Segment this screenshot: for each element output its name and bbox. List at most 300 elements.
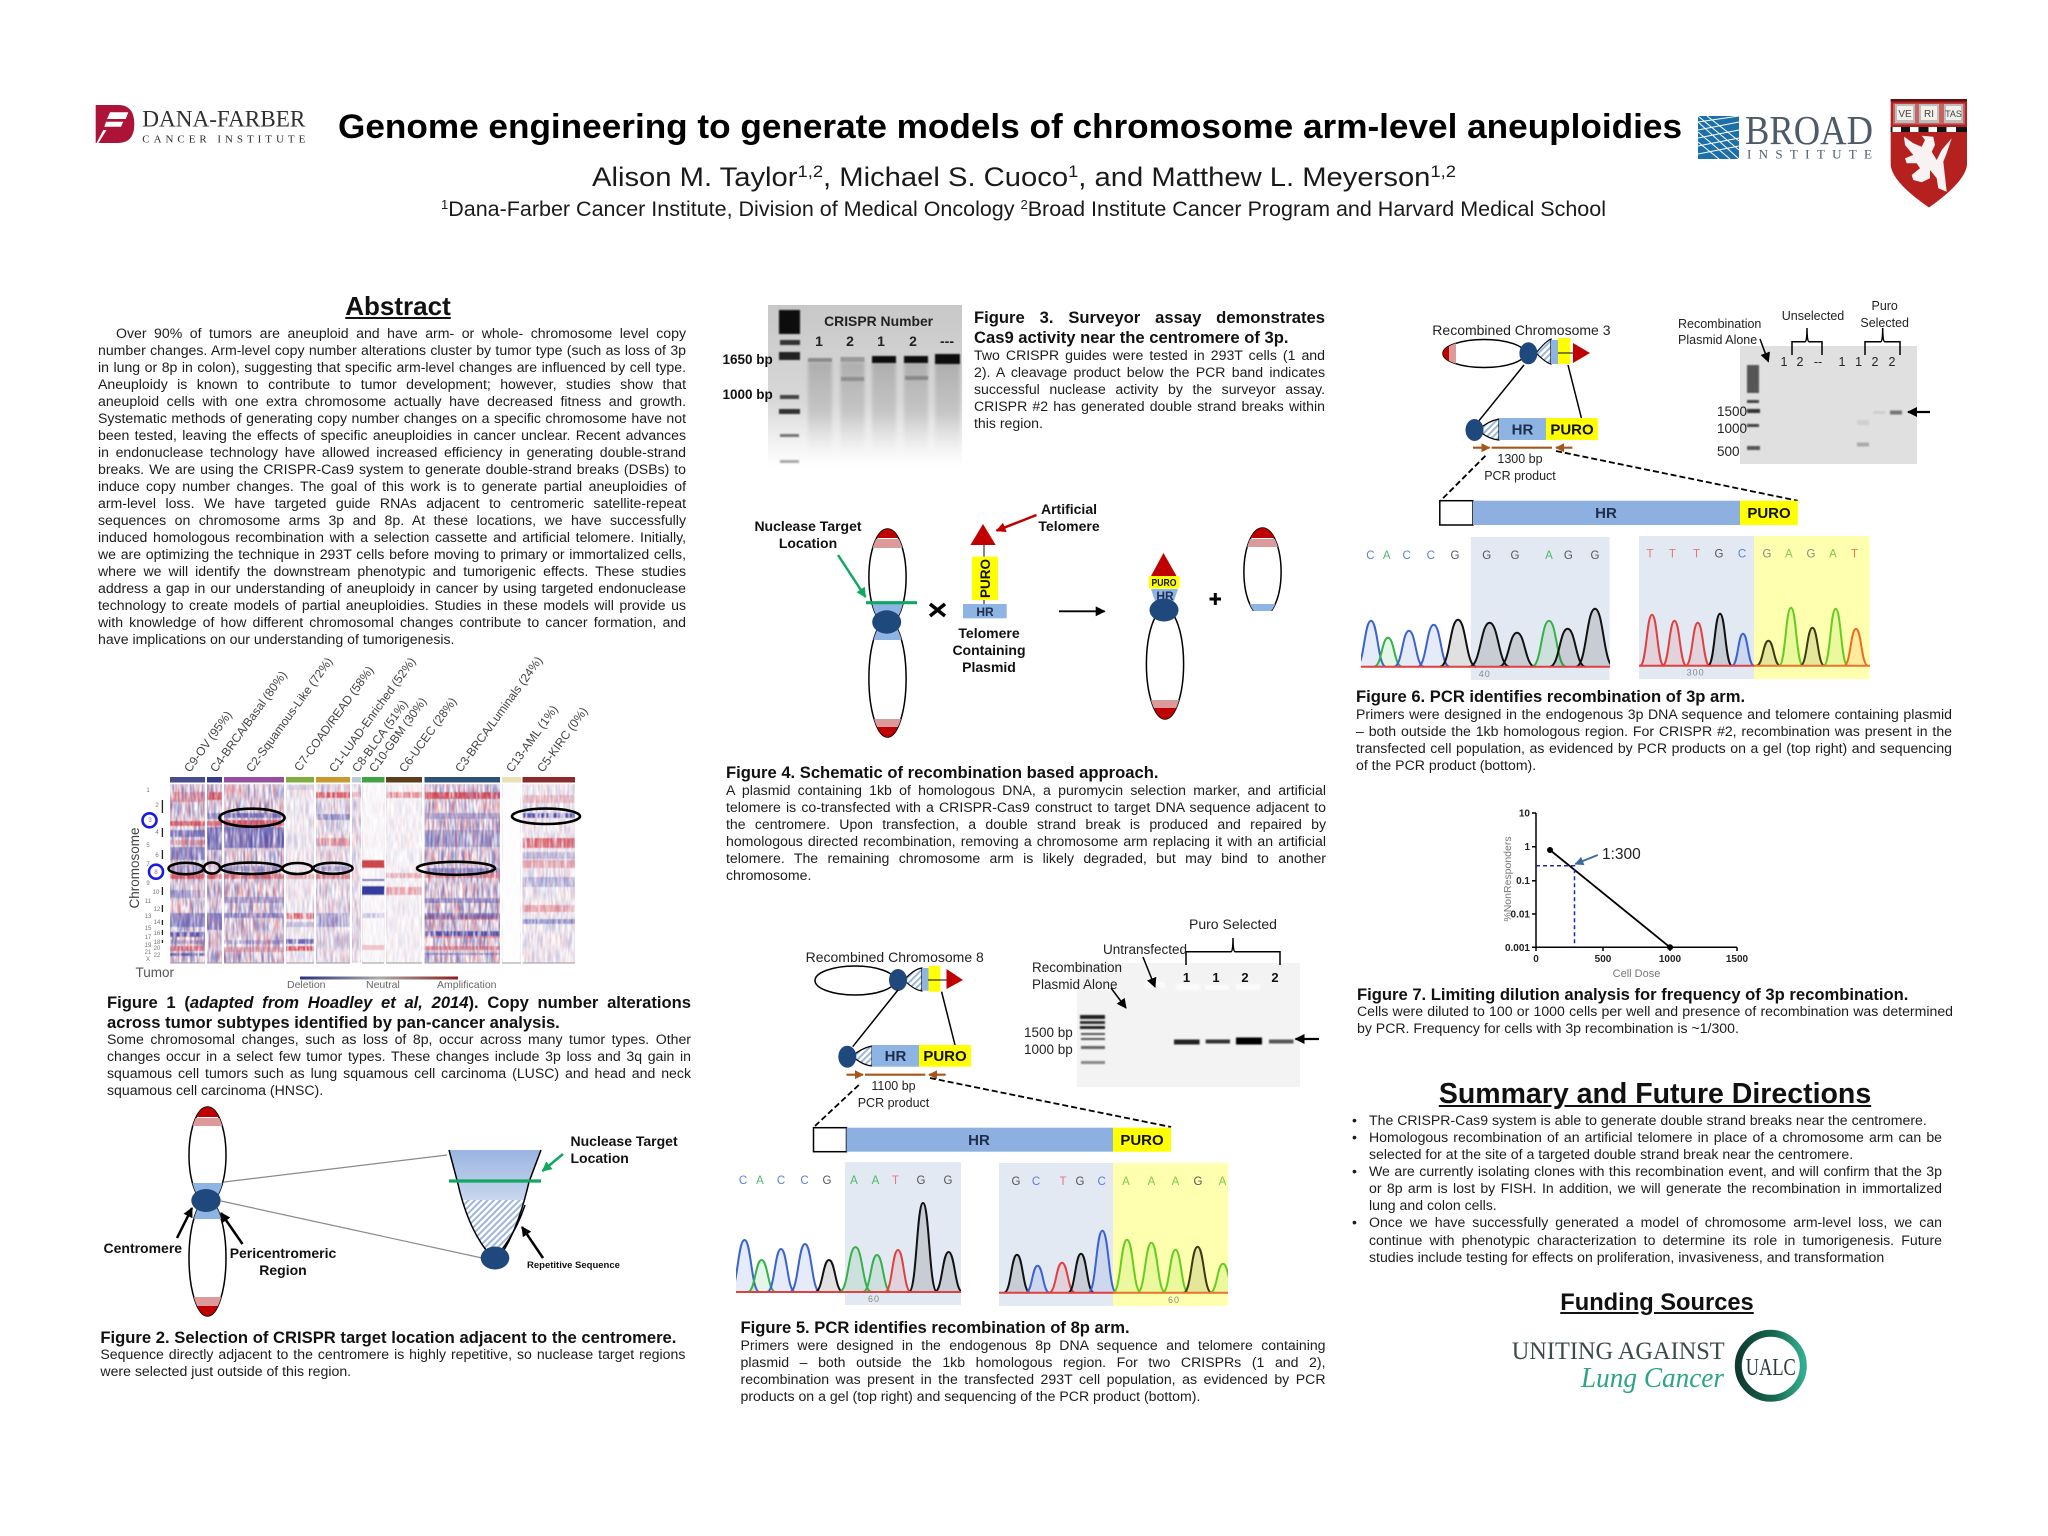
lane numbers: 1 (815, 333, 823, 349)
heading: funding sources: Funding Sources (1560, 1290, 1754, 1316)
lane numbers: 2 (1797, 355, 1804, 369)
size labels: 500 (1717, 444, 1740, 459)
chromatogram: left: A (1545, 550, 1553, 562)
figure 6 caption text: – both outside the 1kb homologous region. For CRISPR #2, recombination was present in the (1356, 723, 1952, 739)
authors: Alison M. Taylor (592, 162, 782, 192)
chromatogram: left: G (1511, 550, 1520, 562)
colour scale legend: Neutral (366, 979, 400, 991)
chromatogram: left: G (917, 1175, 926, 1187)
plasmid: HR (976, 605, 994, 619)
figure 1 caption text: squamous cell carcinoma (HNSC). (107, 1082, 323, 1098)
y axis values (1505, 808, 1530, 954)
text block: abstract: aneuploid cells with one extra chromosome actually have decreased fitness and growth. (98, 393, 686, 409)
text block: abstract: we are optimizing the technique in 293T cells before moving to primary or immortalized cells, (98, 546, 686, 562)
figure 3 caption title (974, 308, 1325, 346)
chromosome numbers: 5 (146, 843, 150, 849)
label: nuclease target location: Nuclease Target (570, 1133, 678, 1149)
text block: summary bullets (1352, 1112, 1942, 1265)
chromosome numbers: 19 (145, 943, 152, 949)
figure 3 caption text: CRISPR #2 has generated double strand breaks within (974, 398, 1325, 414)
text block: abstract: in lung or 8p in colon), suggesting that specific arm-level changes are influenced by cell type. (98, 359, 686, 375)
tumor subtype labels: C7-COAD/READ (58%) (291, 664, 377, 774)
plasmid: PURO (978, 559, 993, 598)
chromosome numbers: 15 (145, 926, 152, 932)
text block: abstract: have implications on our understanding of tumorigenesis. (98, 631, 454, 647)
lane numbers: 2 (1889, 355, 1896, 369)
tumor subtype labels: C9-OV (95%) (181, 708, 235, 775)
label: PCR product: PCR product (1484, 469, 1556, 483)
highlight ovals (168, 809, 580, 875)
primers (1473, 447, 1572, 449)
label: repetitive sequence: Repetitive Sequence (527, 1260, 620, 1271)
figure 2: centromere schematic (104, 1106, 678, 1317)
chromatogram: left: A (756, 1175, 764, 1187)
chromatogram: right: G (1194, 1176, 1203, 1188)
size labels: 1500 bp (1024, 1025, 1073, 1040)
lane numbers: --- (940, 333, 954, 349)
chromatogram: right: G (1715, 548, 1724, 560)
text: • (1352, 1163, 1357, 1179)
figure 6 caption text (1356, 706, 1952, 773)
label: pericentromeric region: Region (259, 1262, 307, 1278)
figure 3 caption title: Cas9 activity near the centromere of 3p. (974, 328, 1288, 346)
label: 1:300: 1:300 (1602, 846, 1641, 863)
colour scale legend: Amplification (437, 979, 497, 991)
tumor subtype labels: C8-BLCA (51%) (349, 697, 411, 775)
label: untransfected: Untransfected (1103, 942, 1187, 957)
tumor subtype labels: C6-UCEC (28%) (396, 695, 460, 775)
figure 5 caption text: products on a gel (top right) and sequencing of the PCR product (bottom). (740, 1388, 1200, 1404)
label: PCR product (1484, 452, 1556, 483)
chromatogram: right: T (1851, 548, 1858, 560)
text block: abstract (98, 325, 686, 647)
label: PCR product: 1300 bp (1497, 452, 1543, 466)
recombined chromosome diagram (815, 966, 963, 1047)
figure 1 caption text: squamous cell tumors such as lung squamous cell carcinoma (LUSC) and head and neck (107, 1065, 691, 1081)
brackets (1792, 328, 1900, 355)
chromatogram: left (730, 1162, 963, 1305)
x axis values: 500 (1595, 954, 1612, 965)
chromatogram: right: G (1012, 1176, 1021, 1188)
figure 7: limiting dilution chart (1502, 808, 1749, 980)
chromatogram: left: A (1383, 550, 1391, 562)
authors: , Michael S. Cuoco (823, 162, 1068, 192)
label: PCR product (858, 1079, 930, 1110)
plus sign (1210, 593, 1221, 605)
chromosome numbers: 17 (145, 935, 152, 941)
logo: Broad Institute (1698, 107, 1873, 162)
plasmid (963, 524, 1007, 619)
logo: Harvard shield (1890, 99, 1967, 208)
text block: abstract: Aneuploidy is known to contribute to tumor development; however, studies show that (98, 376, 686, 392)
text block: summary bullets: We are currently isolating clones with this recombination event, and will confirm that the 3p (1369, 1163, 1942, 1179)
x axis values: 1000 (1659, 954, 1682, 965)
logo: Broad Institute: INSTITUTE (1747, 146, 1872, 162)
dashed guide (1536, 866, 1574, 947)
label: recombination plasmid alone: Recombination (1032, 960, 1122, 975)
chromosome numbers: 8 (154, 870, 158, 876)
figure 1 caption title: Figure 1 (adapted from Hoadley et al, 2014). Copy number alterations (107, 992, 691, 1012)
nuclease cut line (866, 601, 917, 604)
figure 4 caption text: homologous directed recombination, removing a chromosome arm replacing it with an artificial (726, 833, 1326, 849)
tumor subtype labels: C3-BRCA/Luminals (24%) (452, 654, 545, 775)
logo: Broad Institute: BROAD (1745, 107, 1873, 153)
chromatogram: left: G (1564, 550, 1573, 562)
label: centromere: Centromere (104, 1240, 182, 1256)
chromatogram: right: G (1076, 1176, 1085, 1188)
figure 3 caption text: successful nuclease activity by the surveyor assay. (974, 381, 1325, 397)
logo: Uniting Against Lung Cancer (1512, 1330, 1807, 1402)
gel title: CRISPR Number (824, 313, 934, 329)
chromatogram: left: G (1591, 550, 1600, 562)
chromatogram: left: G (1482, 550, 1491, 562)
figure 7 caption title: Figure 7. Limiting dilution analysis for frequency of 3p recombination. (1357, 984, 1908, 1004)
label: artificial telomere: Telomere (1038, 518, 1100, 534)
figure 2 caption text: Sequence directly adjacent to the centromere is highly repetitive, so nuclease target regions (100, 1346, 685, 1362)
figure 1 caption title (107, 992, 691, 1032)
chromatogram: left: C (1366, 550, 1375, 562)
chromatogram: left: T (892, 1175, 899, 1187)
label: nuclease target location: Nuclease Target (754, 518, 862, 534)
text block: abstract: Systematic methods of generating copy number changes on a specific chromosome have not (98, 410, 686, 426)
chromatogram: left: 40 (1479, 669, 1491, 679)
chromatogram: right: 60 (1168, 1295, 1180, 1305)
tumor subtype labels: C2-Squamous-Like (72%) (243, 655, 336, 775)
y axis title: %NonResponders (1502, 836, 1514, 922)
y axis values: 10 (1519, 808, 1530, 820)
chromatogram: left: C (777, 1175, 785, 1187)
reaction arrow (1059, 610, 1105, 612)
arrows to gel lanes (1111, 957, 1155, 1008)
label: recombined chromosome 8: Recombined Chromosome 8 (806, 949, 984, 965)
text block: abstract: with knowledge of how different chromosomal changes contribute to cancer formation, and (98, 614, 686, 630)
figure 3 caption title: Figure 3. Surveyor assay demonstrates (974, 308, 1325, 326)
label: nuclease target location: Location (570, 1150, 629, 1166)
figure 4 caption text (726, 782, 1326, 883)
tumor subtype labels: C13-AML (1%) (503, 703, 561, 775)
logo: Uniting Against Lung Cancer: UNITING AGAINST (1512, 1338, 1725, 1365)
figure 4 caption text: chromosome. (726, 867, 811, 883)
label: recombination plasmid alone: Plasmid Alone (1678, 333, 1757, 347)
chromosome numbers: 7 (146, 862, 150, 868)
figure 5 caption text: Primers were designed in the endogenous 8p DNA sequence and telomere containing (740, 1337, 1326, 1353)
figure 1 caption title: across tumor subtypes identified by pan-cancer analysis. (107, 1012, 560, 1032)
chromatogram: left: C (800, 1175, 809, 1187)
gel image (1077, 963, 1300, 1087)
figure 1 caption text (107, 1031, 691, 1098)
text block: abstract: been tested, leaving the effects of specific aneuploidies in cancer unclear. Recent advances (98, 427, 686, 443)
affiliations: Dana-Farber Cancer Institute, Division of Medical Oncology (448, 197, 1021, 221)
chromatogram: right: 300 (1687, 668, 1705, 678)
label: telomere containing plasmid: Telomere (958, 625, 1020, 641)
chromatogram: right: G (1807, 548, 1816, 560)
figure 5 caption text: plasmid – both outside the 1kb homologous region. For two CRISPRs (1 and 2), (740, 1354, 1326, 1370)
funnel: pericentromeric detail (445, 1150, 545, 1270)
figure 5 caption text (740, 1337, 1326, 1404)
figure 5 caption text: recombination was present in the transfected 293T cell population, as evidenced by PCR (740, 1371, 1326, 1387)
lane numbers: 1 (1212, 970, 1220, 985)
HR PURO product: PURO (1550, 422, 1594, 438)
arrow: nuclease target (542, 1154, 563, 1171)
logo: Harvard shield: VE (1898, 109, 1912, 120)
gel band arrow (1908, 411, 1930, 413)
text block: abstract: sequences on chromosome arms 3p and 8p. At these locations, we have successfully (98, 512, 686, 528)
chromatogram: left: G (1451, 550, 1460, 562)
blue chromosome markers (142, 813, 163, 879)
chromatogram: right: A (1829, 548, 1837, 560)
label: telomere containing plasmid (952, 625, 1026, 675)
chromatogram: left: A (850, 1175, 858, 1187)
label: nuclease target location (754, 518, 862, 551)
dashed zoom lines (1441, 451, 1798, 501)
primers (846, 1074, 946, 1076)
figure 1 caption text: Some chromosomal changes, such as loss of 8p, occur across many tumor types. Other (107, 1031, 691, 1047)
chromosome numbers: 20 (154, 946, 161, 952)
chromosome axis label: Chromosome (127, 827, 142, 909)
label: recombination plasmid alone (1678, 317, 1761, 347)
figure 3 caption text (974, 347, 1325, 431)
size labels (1024, 1025, 1073, 1057)
text block: abstract: breaks. We are using the CRISPR-Cas9 system to generate double-strand breaks (DSBs) to (98, 461, 686, 477)
lane numbers: 2 (1872, 355, 1879, 369)
x axis values (1533, 954, 1749, 965)
size labels: 1000 (1717, 421, 1747, 436)
text block: summary bullets: lung and colon cells. (1369, 1197, 1497, 1213)
bracket: puro selected (1186, 938, 1280, 965)
gel image (768, 305, 962, 467)
label: nuclease target location: Location (779, 535, 837, 551)
arrow: pericentromeric region (221, 1213, 242, 1244)
text block: summary bullets: The CRISPR-Cas9 system is able to generate double strand breaks near the centromere. (1369, 1112, 1927, 1128)
lane numbers: 1 (1855, 355, 1862, 369)
label: unselected: Unselected (1782, 309, 1844, 323)
HR PURO product: PURO (923, 1048, 967, 1065)
heading: summary and future directions: Summary and Future Directions (1439, 1078, 1871, 1110)
chromosome numbers: 16 (154, 931, 161, 937)
tumor label: Tumor (136, 965, 175, 980)
label: artificial telomere: Artificial (1041, 501, 1097, 517)
authors (592, 162, 1456, 192)
zoom lines (221, 1155, 482, 1258)
x axis title: Cell Dose (1613, 968, 1660, 980)
size labels: 1000 bp (722, 387, 773, 402)
figure 3 caption text: 2). A cleavage product below the PCR band indicates (974, 364, 1325, 380)
figure 6 caption text: of the PCR product (bottom). (1356, 757, 1536, 773)
arrow: nuclease target (838, 555, 866, 597)
lane numbers: 2 (1271, 970, 1279, 985)
logo: Harvard shield: TAS (1945, 109, 1962, 119)
affiliations (441, 197, 1606, 221)
chromatogram: right: T (1669, 548, 1676, 560)
chromosome numbers: 14 (154, 920, 161, 926)
chromosome: recombined: HR (1156, 589, 1174, 603)
label: recombined chromosome 3: Recombined Chromosome 3 (1432, 322, 1611, 338)
text block: abstract: Over 90% of tumors are aneuploid and have arm- or whole- chromosome level copy (116, 325, 686, 341)
chromosome numbers (145, 788, 161, 963)
chromatogram: right: C (1097, 1176, 1106, 1188)
tumor subtype labels: C4-BRCA/Basal (80%) (207, 668, 290, 775)
arrow: repetitive sequence (522, 1227, 543, 1258)
lane numbers: -- (1814, 355, 1822, 369)
sequence bar: PURO (1120, 1132, 1164, 1149)
label: pericentromeric region: Pericentromeric (230, 1245, 337, 1261)
chromatogram: left: G (944, 1175, 953, 1187)
authors: 1 (1068, 162, 1078, 181)
lane numbers: 2 (1241, 970, 1249, 985)
text block: abstract: in endonuclease technology have allowed increased efficiency in generating double-strand (98, 444, 686, 460)
size labels (1717, 404, 1747, 459)
figure 2 caption title: Figure 2. Selection of CRISPR target location adjacent to the centromere. (100, 1328, 676, 1346)
chromatogram: right: A (1785, 548, 1793, 560)
tumor subtype labels: C10-GBM (30%) (366, 695, 430, 775)
logo: Dana-Farber Cancer Institute: CANCER INSTITUTE (142, 134, 306, 146)
figure 6 caption text: Primers were designed in the endogenous 3p DNA sequence and telomere containing plasmid (1356, 706, 1952, 722)
chromatogram: right: T (1693, 548, 1700, 560)
text block: summary bullets: continue with phenotypic characterization to determine its role in tumorigenesis. Future (1369, 1232, 1942, 1248)
chromatogram: right: A (1122, 1176, 1130, 1188)
label: recombination plasmid alone (1032, 960, 1122, 992)
figure 5: PCR of 8p arm (736, 916, 1319, 1306)
authors: 1,2 (1430, 162, 1456, 181)
figure 1: copy number heatmap (127, 654, 591, 991)
tumor subtype labels: C1-LUAD-Enriched (52%) (326, 655, 419, 775)
logo: Harvard shield: RI (1924, 109, 1934, 120)
sequence bar: PURO (1747, 505, 1791, 522)
label: telomere containing plasmid: Plasmid (962, 659, 1016, 675)
tumor subtype labels (181, 654, 591, 775)
chromatogram: left: A (872, 1175, 880, 1187)
affiliations: Broad Institute Cancer Program and Harvard Medical School (1028, 197, 1606, 221)
size labels: 1000 bp (1024, 1042, 1073, 1057)
chromosome: target (868, 528, 907, 738)
logo: Dana-Farber Cancer Institute: DANA-FARBER (142, 107, 306, 132)
axes (1532, 813, 1737, 951)
text block: abstract: address a gap in our understanding of aneuploidy in cancer by using targeted endonuclease (98, 580, 686, 596)
tumor subtype labels: C5-KIRC (0%) (534, 704, 591, 775)
chromosome numbers: 4 (155, 830, 159, 836)
figure 4 caption text: telomere. The remaining chromosome arm is likely degraded, but may bind to another (726, 850, 1326, 866)
label: artificial telomere (1038, 501, 1100, 534)
text block: abstract: technology to create models of partial aneuploidies. Studies in these models will provide us (98, 597, 686, 613)
arrow to ladder lane (1760, 339, 1768, 362)
figure 3: surveyor gel (722, 305, 962, 464)
sequence bar (1440, 501, 1798, 525)
lane numbers: 2 (909, 333, 917, 349)
chromatogram: right: C (1032, 1176, 1040, 1188)
text block: abstract: number changes. Arm-level copy number alterations cluster by tumor type (such as loss of 3p (98, 342, 686, 358)
heading: Abstract: Abstract (345, 291, 451, 321)
colour scale legend (287, 976, 497, 991)
arrow: artificial telomere (996, 515, 1036, 531)
chromosome numbers: 13 (145, 914, 152, 920)
size labels (722, 352, 773, 402)
HR PURO product (1466, 418, 1598, 441)
chromatogram: right: T (1059, 1176, 1067, 1188)
logo: Dana-Farber Cancer Institute (96, 105, 306, 146)
recombined chromosome diagram (1442, 338, 1590, 421)
lane numbers (815, 333, 954, 349)
figure 2 caption text: were selected just outside of this region. (100, 1363, 351, 1379)
text block: abstract: induced homologous recombination with a selection cassette and artificial telomere. Initially, (98, 529, 686, 545)
heatmap (170, 782, 575, 963)
chromosome numbers: X (146, 957, 150, 963)
chromatogram: left: C (739, 1175, 747, 1187)
figure 4 caption text: the centromere. Upon transfection, a double strand break is produced and repaired by (726, 816, 1326, 832)
label: nuclease target location (570, 1133, 678, 1166)
dilution line (1547, 847, 1673, 950)
figure 4: recombination schematic (754, 501, 1282, 738)
figure 7 caption text (1357, 1003, 1953, 1036)
lane numbers: 1 (1781, 355, 1788, 369)
figure 5 caption title: Figure 5. PCR identifies recombination of 8p arm. (740, 1318, 1130, 1336)
x axis values: 0 (1533, 954, 1539, 965)
label: puro selected: Puro Selected (1189, 916, 1277, 932)
chromatogram: left: G (823, 1175, 832, 1187)
label: puro selected: Selected (1860, 316, 1909, 330)
chromosome arm fragment (1243, 527, 1282, 611)
figure 4 caption title: Figure 4. Schematic of recombination based approach. (726, 762, 1158, 782)
y axis values: 0.001 (1505, 943, 1530, 954)
figure 4 caption text: A plasmid containing 1kb of homologous DNA, a puromycin selection marker, and artificial (726, 782, 1326, 798)
chromatogram: right: A (1219, 1176, 1227, 1188)
HR PURO product: HR (1512, 422, 1533, 438)
text block: summary bullets: studies include testing for effects on proliferation, invasiveness, and transformation (1369, 1249, 1884, 1265)
sequence bar (814, 1128, 1171, 1152)
figure 6: PCR of 3p arm (1361, 299, 1930, 680)
chromosome numbers: 12 (154, 907, 161, 913)
authors: , and Matthew L. Meyerson (1078, 162, 1430, 192)
figure 3 caption text: this region. (974, 415, 1043, 431)
arrow: centromere (177, 1208, 192, 1238)
lane numbers: 1 (877, 333, 885, 349)
chromosome numbers: 9 (146, 881, 150, 887)
logo: Uniting Against Lung Cancer: UALC (1746, 1355, 1796, 1381)
y axis values: 0.1 (1516, 876, 1530, 887)
text: • (1352, 1112, 1357, 1128)
text block: abstract: arm-level loss. We have targeted guide RNAs adjacent to centromeric satellite-repeat (98, 495, 686, 511)
chromatogram: right: T (1646, 548, 1654, 560)
label: telomere containing plasmid: Containing (952, 642, 1026, 658)
sequence bar: HR (1595, 505, 1617, 522)
chromatogram: right: A (1172, 1176, 1180, 1188)
text block: summary bullets: Homologous recombination of an artificial telomere in place of a chromosome arm can be (1369, 1129, 1942, 1145)
chromatogram: right (1639, 536, 1870, 679)
title: Genome engineering to generate models of chromosome arm-level aneuploidies (338, 108, 1682, 146)
chromosome: recombined: PURO (1152, 578, 1177, 589)
chromatogram: right: G (1763, 548, 1772, 560)
chromosome numbers: 1 (146, 788, 150, 794)
authors: 1,2 (798, 162, 823, 181)
affiliations: 2 (1021, 197, 1028, 212)
size labels: 1650 bp (722, 352, 773, 367)
chromosome numbers: 11 (145, 899, 152, 905)
label: recombination plasmid alone: Plasmid Alone (1032, 977, 1118, 992)
chromosome numbers: 22 (154, 953, 161, 959)
chromosome numbers: 3 (148, 818, 152, 824)
logo: Uniting Against Lung Cancer: Lung Cancer (1580, 1362, 1725, 1394)
text block: abstract: induce copy number changes. The goal of this work is to generate partial aneuploidies of (98, 478, 686, 494)
figure 2 caption text (100, 1346, 685, 1379)
sequence bar: HR (968, 1132, 990, 1149)
text block: summary bullets: selected for at the site of a targeted double strand break near the centromere. (1369, 1146, 1853, 1162)
lane numbers: 1 (1183, 970, 1190, 985)
y axis values: 1 (1524, 842, 1530, 853)
chromatogram: right (999, 1163, 1236, 1306)
lane numbers: 2 (846, 333, 854, 349)
figure 1 caption text: changes occur in a select few tumor types. These changes include 3p loss and 3q gain in (107, 1048, 691, 1064)
gel band arrow (1296, 1038, 1319, 1040)
x axis values: 1500 (1726, 954, 1749, 965)
